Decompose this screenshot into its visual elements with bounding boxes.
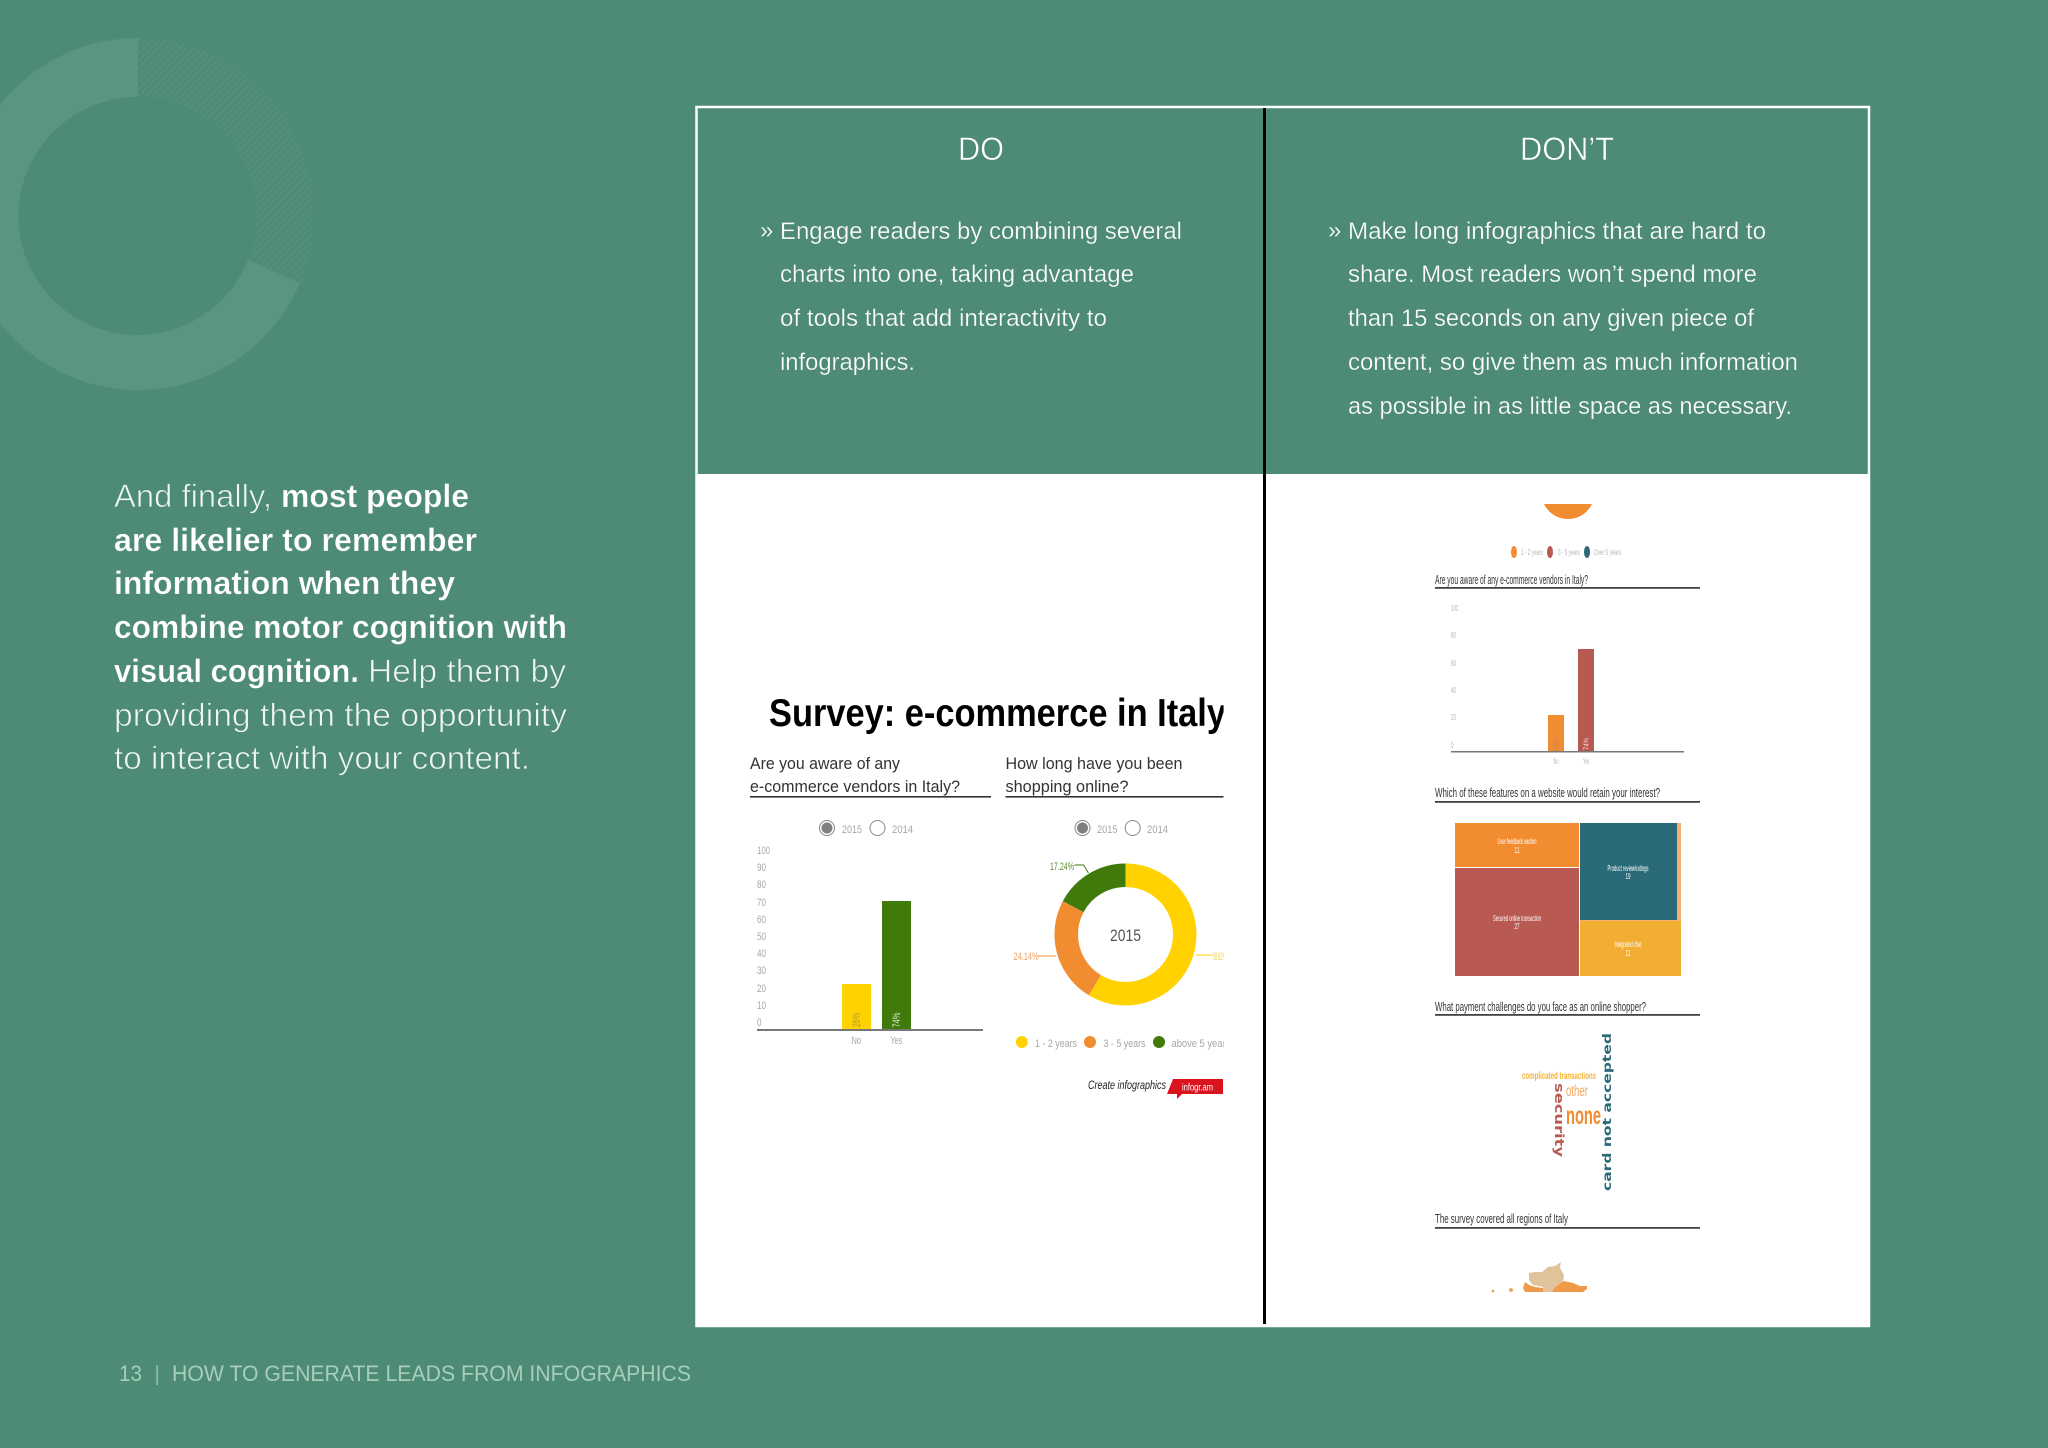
- intro text block: Help them by: [368, 653, 566, 689]
- intro text block: [114, 478, 567, 776]
- treemap: website features: 11: [1514, 845, 1520, 855]
- bar chart: awareness: 26%: [851, 1012, 863, 1028]
- bar chart: awareness: No: [852, 1035, 861, 1047]
- bar chart: awareness: 60: [757, 914, 766, 926]
- text: 58.62%: [1213, 951, 1226, 963]
- radio buttons: donut chart: 2015: [1097, 824, 1118, 836]
- text block: do: Engage readers by combining several: [780, 218, 1182, 245]
- pie legend: Over 5 years: [1594, 547, 1621, 557]
- text block: don't: content, so give them as much information: [1348, 349, 1798, 376]
- heading: don't: DON’T: [1520, 131, 1614, 167]
- bar chart: awareness: Yes: [1583, 756, 1589, 766]
- bar chart: awareness: 50: [757, 931, 766, 943]
- panel: long survey example: [1435, 504, 1700, 1292]
- bar chart: awareness: 90: [757, 862, 766, 874]
- text block: don't: as possible in as little space as necessary.: [1348, 393, 1792, 420]
- question: awareness: e-commerce vendors in Italy?: [750, 777, 960, 796]
- map: cropped Italy: [1492, 1262, 1587, 1292]
- donut legend: [1016, 1036, 1226, 1050]
- text block: do: »: [760, 217, 773, 244]
- infogr.am badge: infogr.am: [1182, 1082, 1213, 1094]
- bar chart: awareness: 60: [1451, 658, 1456, 668]
- treemap: website features: 19: [1626, 871, 1631, 881]
- bar chart: awareness: 70: [757, 897, 766, 909]
- bar chart: awareness: 100: [1451, 603, 1458, 613]
- question heading: regions: The survey covered all regions of Italy: [1435, 1211, 1568, 1226]
- word cloud: none: [1566, 1102, 1601, 1130]
- heading: do: DO: [958, 131, 1004, 167]
- text block: do: of tools that add interactivity to: [780, 305, 1107, 332]
- donut chart: shopping duration: 2015: [1110, 926, 1141, 945]
- text block: don't: Make long infographics that are hard to: [1348, 218, 1766, 245]
- question: awareness: Are you aware of any: [750, 754, 900, 773]
- question heading: awareness: Are you aware of any e-commerce vendors in Italy?: [1435, 572, 1588, 587]
- donut chart: shopping duration: 24.14%: [1014, 951, 1039, 963]
- word cloud: other: [1566, 1083, 1588, 1100]
- bar chart: awareness: 20: [757, 983, 766, 995]
- text block: don't: share. Most readers won’t spend more: [1348, 261, 1757, 288]
- treemap: website features: User feedback section: [1498, 836, 1537, 846]
- question: shopping duration: How long have you been: [1006, 754, 1182, 773]
- radio buttons: bar chart: [820, 820, 913, 836]
- word cloud: card not accepted: [1600, 1033, 1614, 1191]
- bar chart: awareness: 80: [1451, 630, 1456, 640]
- question: shopping duration: [1006, 754, 1224, 798]
- radio buttons: donut chart: [1075, 820, 1168, 836]
- intro text block: visual cognition.: [114, 653, 359, 689]
- decorative donut ring: [0, 38, 314, 390]
- text block: don't: than 15 seconds on any given piece of: [1348, 305, 1754, 332]
- survey title: Survey: e-commerce in Italy: [769, 692, 1226, 735]
- donut chart: shopping duration: 17.24%: [1050, 861, 1074, 873]
- text block: do: [760, 217, 1182, 376]
- treemap: website features: Product review/ratings: [1608, 863, 1648, 873]
- bar chart: awareness: [757, 845, 983, 1047]
- footer: HOW TO GENERATE LEADS FROM INFOGRAPHICS: [172, 1361, 691, 1386]
- bar chart: awareness: 20: [1451, 712, 1456, 722]
- bar chart: awareness: 74%: [891, 1012, 903, 1028]
- question: shopping duration: shopping online?: [1006, 777, 1128, 796]
- radio buttons: bar chart: 2014: [892, 824, 913, 836]
- pie legend: 1 - 2 years: [1521, 547, 1543, 557]
- treemap: website features: Integrated chat: [1614, 939, 1642, 949]
- bar chart: awareness: 0: [1451, 740, 1454, 750]
- pie legend: [1511, 546, 1621, 558]
- question: awareness: [750, 754, 991, 798]
- bar chart: awareness: 80: [757, 879, 766, 891]
- treemap: website features: [1455, 823, 1681, 976]
- radio buttons: bar chart: 2015: [842, 824, 862, 836]
- question heading: payment: What payment challenges do you face as an online shopper?: [1435, 999, 1646, 1014]
- question heading: features: Which of these features on a website would retain your interest?: [1435, 785, 1660, 800]
- panel: do / don't table: [696, 106, 1870, 1327]
- word cloud: [1522, 1033, 1614, 1191]
- donut legend: 3 - 5 years: [1104, 1038, 1146, 1050]
- bar chart: awareness: 30: [757, 965, 766, 977]
- bar chart: awareness: 10: [757, 1000, 766, 1012]
- bar chart: awareness: 74%: [1584, 738, 1590, 750]
- text block: do: infographics.: [780, 349, 915, 376]
- bar chart: awareness: 40: [757, 948, 766, 960]
- bar chart: awareness: 100: [757, 845, 770, 857]
- word cloud: security: [1552, 1083, 1566, 1157]
- infogr.am badge: [1088, 1078, 1223, 1099]
- bar chart: awareness: No: [1554, 756, 1559, 766]
- text block: do: charts into one, taking advantage: [780, 261, 1134, 288]
- treemap: website features: 27: [1514, 921, 1520, 931]
- treemap: website features: 11: [1626, 948, 1631, 958]
- intro text block: information when they: [114, 565, 455, 601]
- radio buttons: donut chart: 2014: [1147, 824, 1168, 836]
- donut chart: shopping duration: [1014, 861, 1226, 994]
- intro text block: most people: [281, 478, 469, 514]
- intro text block: providing them the opportunity: [114, 697, 567, 733]
- infogr.am badge: Create infographics: [1088, 1078, 1166, 1092]
- word cloud: complicated transactions: [1522, 1071, 1596, 1082]
- donut legend: above 5 year: [1172, 1038, 1226, 1050]
- intro text block: are likelier to remember: [114, 522, 477, 558]
- text block: don't: »: [1328, 217, 1341, 244]
- treemap: website features: Secured online transaction: [1493, 913, 1541, 923]
- panel: compact survey example: [750, 692, 1226, 1099]
- intro text block: And finally,: [114, 478, 272, 514]
- pie legend: 3 - 5 years: [1558, 547, 1580, 557]
- intro text block: to interact with your content.: [114, 740, 530, 776]
- bar chart: awareness: 0: [757, 1017, 762, 1029]
- bar chart: awareness: 40: [1451, 685, 1456, 695]
- cropped pie chart: [1544, 504, 1592, 519]
- bar chart: awareness: Yes: [890, 1035, 902, 1047]
- text block: don't: [1328, 217, 1798, 420]
- donut legend: 1 - 2 years: [1035, 1038, 1077, 1050]
- intro text block: combine motor cognition with: [114, 609, 567, 645]
- bar chart: awareness: 26%: [1554, 738, 1560, 750]
- bar chart: awareness: [1451, 603, 1684, 766]
- footer: 13: [119, 1361, 142, 1386]
